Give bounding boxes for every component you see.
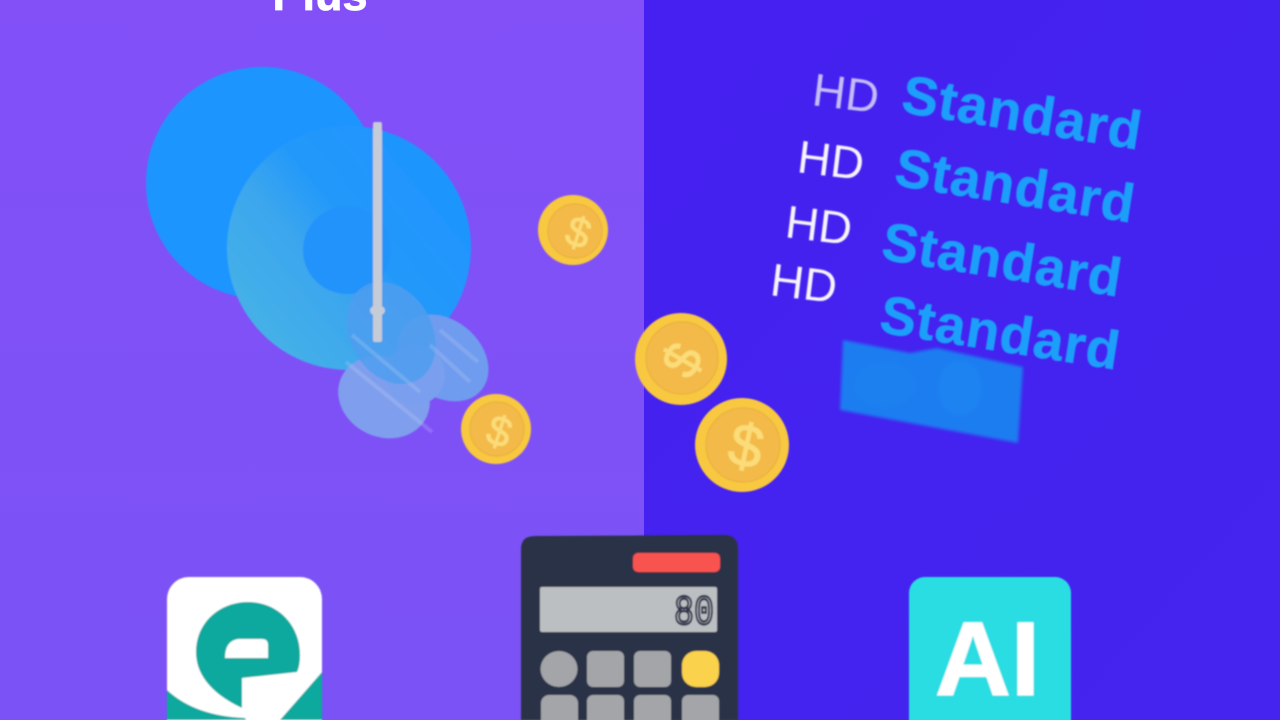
coin lower right xyxy=(695,398,789,492)
row 4: Standard xyxy=(876,285,1125,382)
list: HD and Standard rows xyxy=(768,63,1147,382)
row 3 xyxy=(783,195,1127,309)
blurred blue patch xyxy=(840,340,1023,443)
red indicator xyxy=(633,553,720,572)
key row 2 xyxy=(541,695,719,720)
row 4: HD xyxy=(768,253,840,313)
key row 1 xyxy=(540,651,719,687)
coin top xyxy=(538,195,608,265)
translucent capsules xyxy=(324,266,506,453)
icon: AI app: AI xyxy=(935,601,1040,718)
row 2: Standard xyxy=(891,138,1140,235)
display digits: 80 xyxy=(674,589,714,637)
icon: AI app xyxy=(909,577,1071,720)
coin lower right: $ xyxy=(723,410,770,482)
coin centre xyxy=(635,313,727,405)
letter counter xyxy=(225,639,268,658)
light blue disc xyxy=(227,126,471,370)
coin top: $ xyxy=(560,206,597,258)
coin lower left: $ xyxy=(481,405,518,457)
row 1: Standard xyxy=(898,65,1147,162)
row 3: HD xyxy=(783,195,855,255)
panel: right indigo background xyxy=(644,0,1280,720)
illustration: blue discs and blurred capsules xyxy=(146,67,506,453)
row 2 xyxy=(795,130,1140,235)
row 1: HD xyxy=(810,63,882,123)
row 2: HD xyxy=(795,130,867,190)
large blue circle xyxy=(146,67,378,299)
coin lower left xyxy=(461,394,531,464)
row 4 xyxy=(768,253,1125,382)
panel: left purple background xyxy=(0,0,644,720)
disc centre xyxy=(303,206,391,294)
display xyxy=(540,587,717,632)
row 3: Standard xyxy=(878,212,1127,309)
lower teal band xyxy=(167,672,322,720)
coin centre: $ xyxy=(651,333,715,388)
icon: teal e app xyxy=(167,577,322,720)
icon: calculator xyxy=(521,535,738,720)
vertical rod xyxy=(370,122,385,342)
teal letter bowl xyxy=(196,602,300,708)
